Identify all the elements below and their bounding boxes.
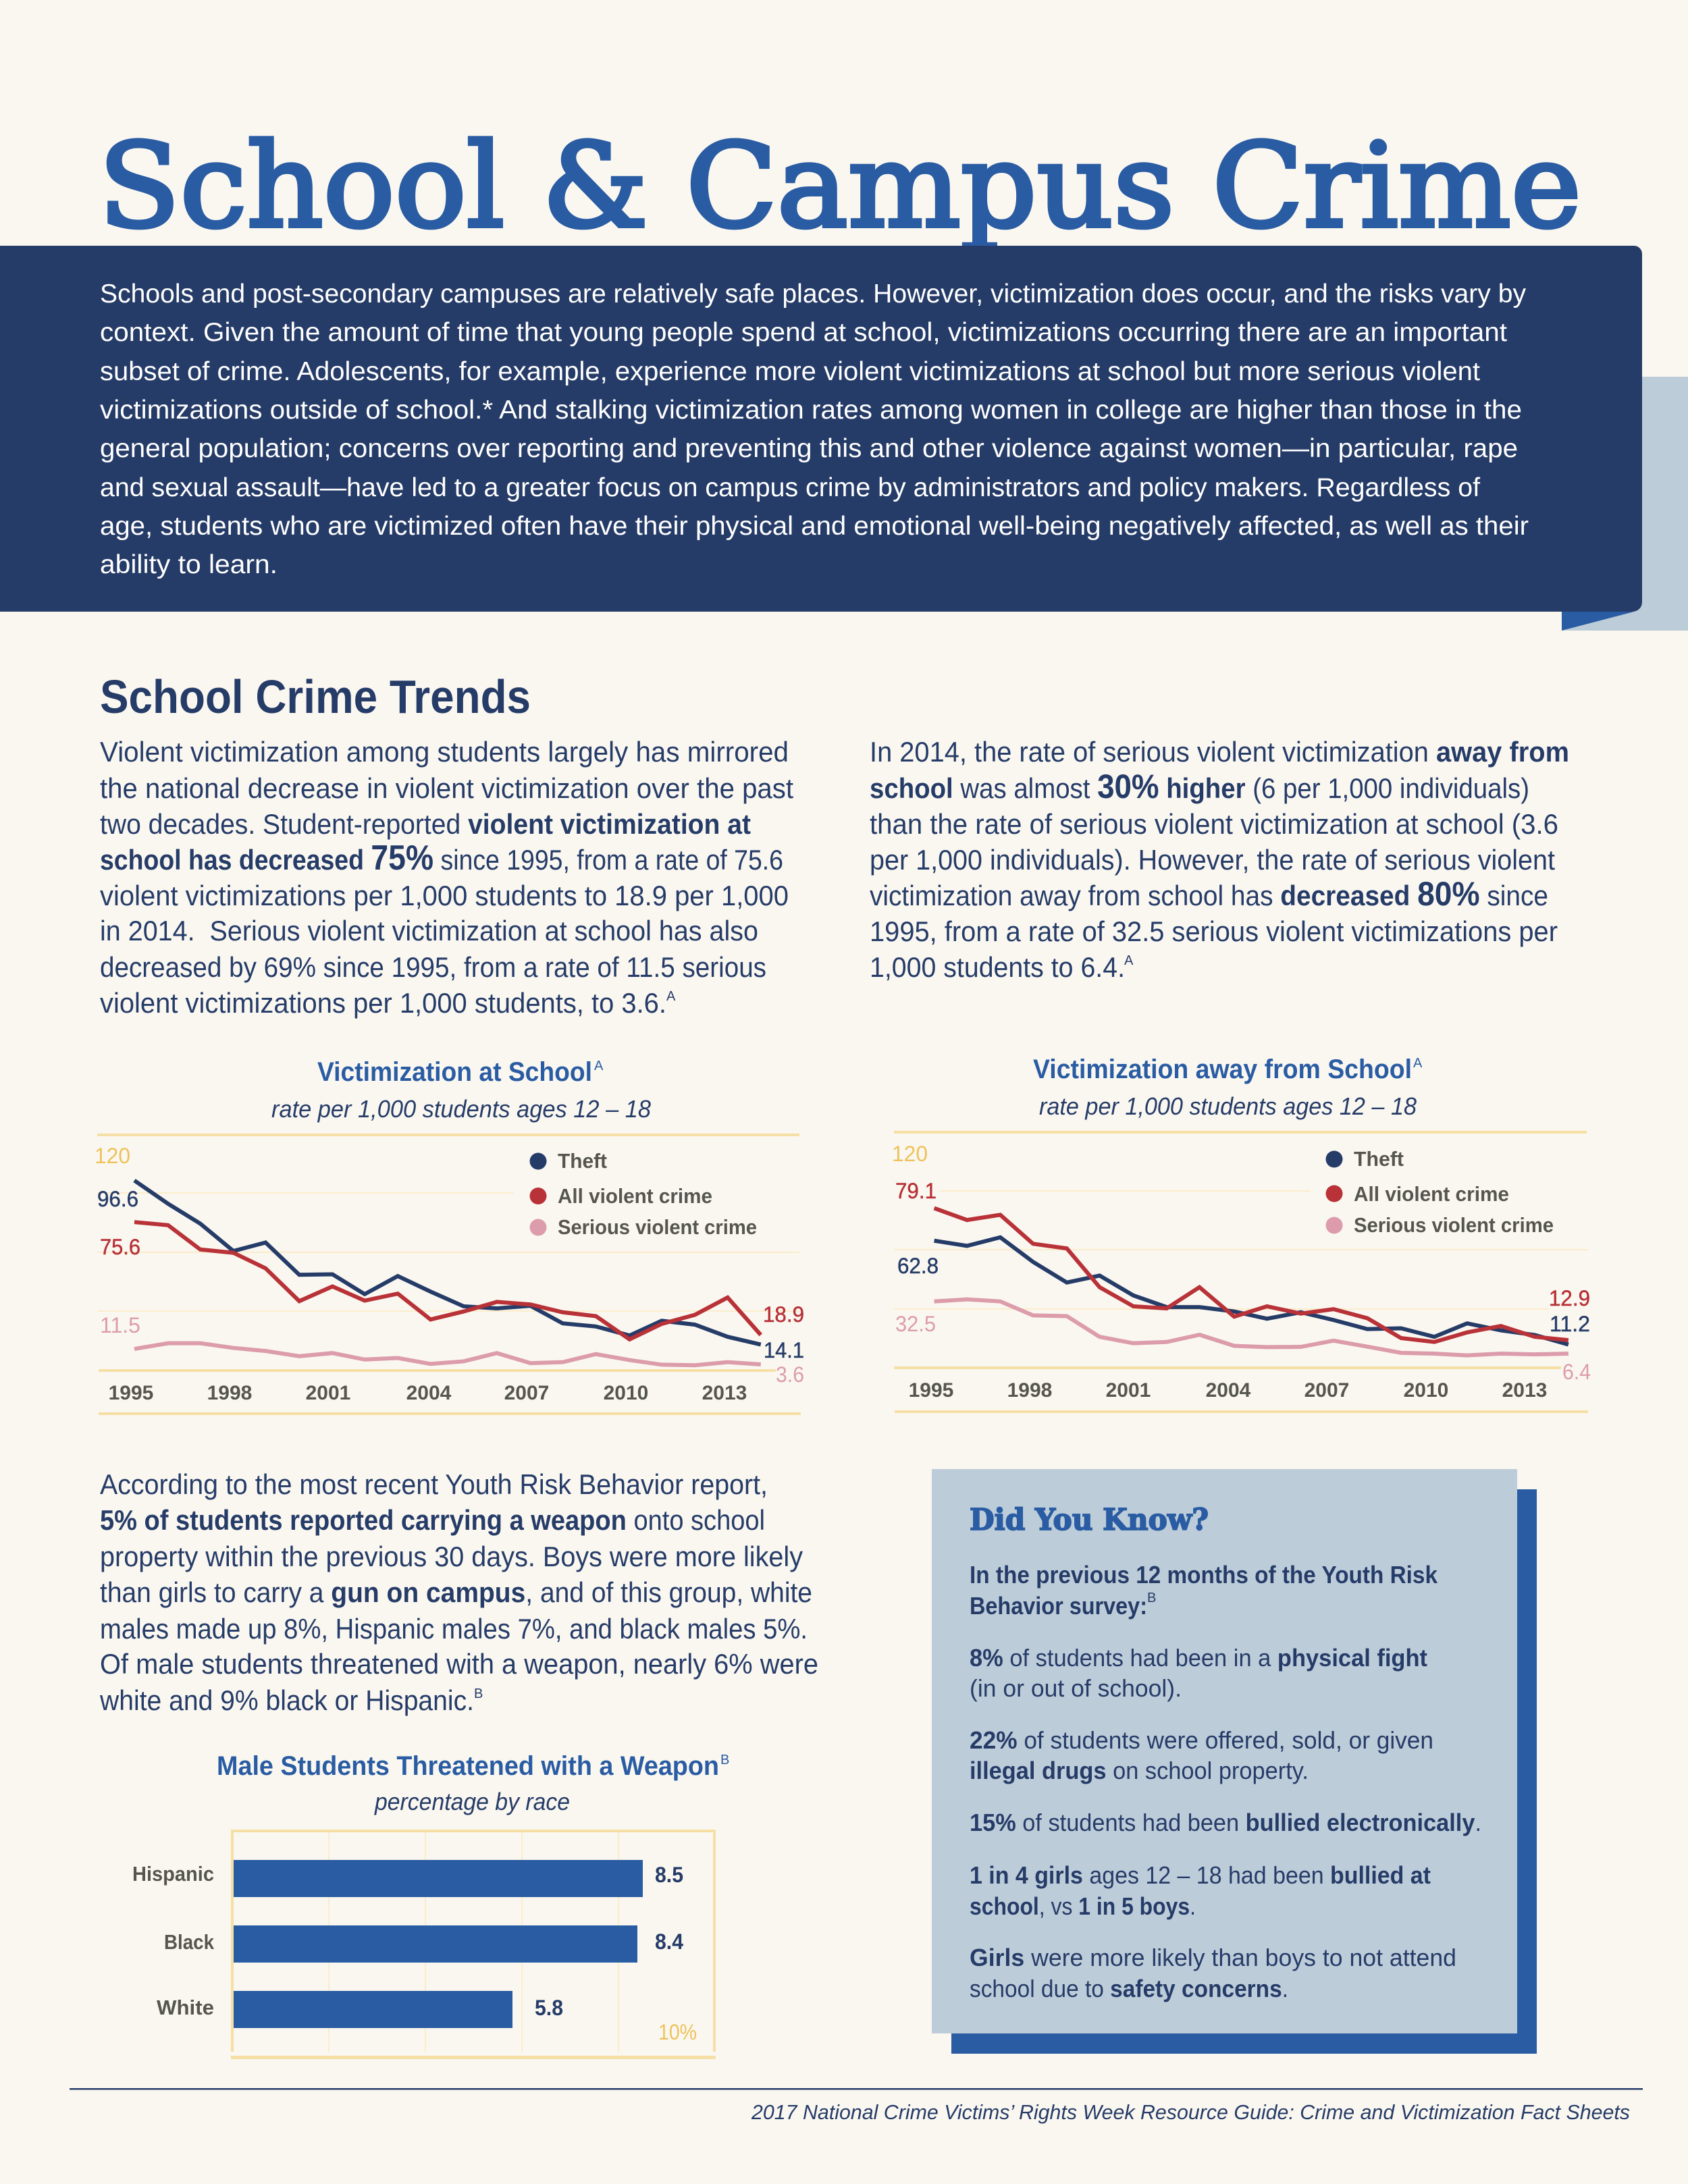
bar: White: 5.8 <box>535 1996 563 2020</box>
x axis years: 2001 <box>1106 1379 1151 1402</box>
text block: school trends right column: victimization away from school has decreased 80% since <box>870 875 1548 913</box>
bar: Hispanic: 8.5 <box>655 1863 683 1887</box>
legend: Theft <box>558 1149 607 1173</box>
x axis years: 2007 <box>504 1382 549 1404</box>
x axis years: 2013 <box>1502 1379 1547 1402</box>
fact: physical fight: 8% of students had been in a physical fight <box>970 1644 1427 1672</box>
text block: school trends right column: 1995, from a rate of 32.5 serious violent victimizations per <box>870 915 1558 947</box>
x axis years: 1995 <box>109 1382 153 1404</box>
x axis years: 2004 <box>406 1382 452 1404</box>
panel: intro banner <box>0 246 1642 612</box>
fact: safety concerns <box>970 1944 1456 2002</box>
series: theft <box>134 1181 761 1345</box>
bar: White: White <box>157 1996 214 2019</box>
legend: All violent crime <box>1354 1182 1509 1206</box>
value labels: 32.5 <box>895 1312 936 1336</box>
value labels: 11.2 <box>1550 1312 1590 1336</box>
fact: illegal drugs: 22% of students were offered, sold, or given <box>970 1726 1433 1754</box>
x axis years: 2004 <box>1206 1379 1251 1402</box>
series: all violent crime <box>934 1208 1568 1342</box>
value labels: 120 <box>892 1142 928 1166</box>
banner ribbon backing <box>1562 377 1688 631</box>
panel heading: Did You Know? <box>970 1503 1209 1537</box>
panel: intro banner: Schools and post-secondary campuses are relatively safe places. However, victimization does occur, and the risks vary by <box>100 279 1526 309</box>
x axis years: 1998 <box>1007 1379 1052 1402</box>
fact: physical fight: (in or out of school). <box>970 1674 1182 1702</box>
panel: intro banner: subset of crime. Adolescents, for example, experience more violent victimizations at school but more serious violent <box>100 357 1480 386</box>
text block: school trends right column: In 2014, the rate of serious violent victimization away from <box>870 736 1569 768</box>
panel: intro banner: victimizations outside of school.* And stalking victimization rates among women in college are higher than those in the <box>100 396 1522 425</box>
x axis years: 2010 <box>604 1382 648 1404</box>
series: all violent crime <box>134 1222 761 1339</box>
series: theft <box>934 1237 1568 1345</box>
series: serious violent crime <box>134 1343 761 1365</box>
legend: Serious violent crime <box>558 1215 757 1239</box>
text block: weapons paragraph: B <box>474 1686 483 1701</box>
chart: Victimization away from School <box>892 1055 1591 1413</box>
text block: weapons paragraph: According to the most recent Youth Risk Behavior report, <box>100 1468 768 1500</box>
text block: weapons paragraph: property within the previous 30 days. Boys were more likely <box>100 1541 803 1572</box>
x axis years <box>909 1379 1547 1402</box>
chart title: Victimization away from School <box>1033 1055 1412 1084</box>
panel intro: Behavior survey: <box>970 1592 1147 1620</box>
panel: intro banner: age, students who are victimized often have their physical and emotional well-being negatively affected, as well as their <box>100 512 1529 541</box>
panel: Did You Know <box>932 1469 1537 2054</box>
text block: school trends right column: than the rate of serious violent victimization at school (3.6 <box>870 808 1558 840</box>
title: School & Campus Crime <box>99 118 1581 254</box>
text block: weapons paragraph: than girls to carry a gun on campus, and of this group, white <box>100 1576 812 1608</box>
chart subtitle: rate per 1,000 students ages 12 – 18 <box>271 1095 651 1123</box>
fact: illegal drugs <box>970 1726 1433 1784</box>
text block: school trends left column: school has decreased 75% since 1995, from a rate of 75.6 <box>100 838 783 878</box>
fact: bullied electronically: 15% of students had been bullied electronically. <box>970 1809 1481 1836</box>
text block: weapons paragraph: 5% of students reported carrying a weapon onto school <box>100 1504 765 1536</box>
value labels: 6.4 <box>1562 1360 1591 1384</box>
value labels: 3.6 <box>776 1362 804 1387</box>
value labels: 11.5 <box>100 1313 140 1337</box>
x axis years: 1998 <box>207 1382 252 1404</box>
fact: bullied at school <box>970 1861 1431 1920</box>
panel: intro banner: context. Given the amount of time that young people spend at school, victimizations occurring there are an important <box>100 318 1507 347</box>
x axis years: 2001 <box>306 1382 350 1404</box>
panel: intro banner: and sexual assault—have led to a greater focus on campus crime by administrators and policy makers. Regardless of <box>100 473 1480 502</box>
value labels: 79.1 <box>895 1179 937 1203</box>
text block: school trends left column: decreased by 69% since 1995, from a rate of 11.5 serious <box>100 951 766 983</box>
bar: Black: Black <box>164 1930 215 1954</box>
chart title: Male Students Threatened with a Weapon <box>217 1751 719 1781</box>
legend <box>529 1149 757 1239</box>
text block: weapons paragraph: Of male students threatened with a weapon, nearly 6% were <box>100 1648 818 1680</box>
panel intro <box>970 1561 1438 1620</box>
text block: school trends left column: A <box>666 989 676 1004</box>
fact: safety concerns: school due to safety concerns. <box>970 1975 1288 2002</box>
panel intro: B <box>1147 1591 1156 1605</box>
panel: intro banner: general population; concerns over reporting and preventing this and other violence against women—in particular, rape <box>100 434 1518 463</box>
chart title: A <box>1413 1056 1423 1071</box>
value labels <box>892 1142 1591 1384</box>
series: serious violent crime <box>934 1300 1568 1356</box>
footer source line: 2017 National Crime Victims’ Rights Week Resource Guide: Crime and Victimization Fact Sheets <box>751 2100 1630 2124</box>
chart: Victimization at School <box>95 1057 804 1415</box>
text block: weapons paragraph: males made up 8%, Hispanic males 7%, and black males 5%. <box>100 1613 808 1645</box>
text block: school trends left column: the national decrease in violent victimization over the past <box>100 772 793 804</box>
text block: weapons paragraph <box>99 1468 818 1716</box>
text block: school trends left column: Violent victimization among students largely has mirrored <box>100 736 789 768</box>
chart title: B <box>720 1753 729 1767</box>
text block: school trends right column <box>870 736 1569 983</box>
value labels: 120 <box>95 1144 130 1168</box>
fact: safety concerns: Girls were more likely than boys to not attend <box>970 1944 1456 1971</box>
x axis years <box>109 1382 747 1404</box>
text block: school trends left column <box>100 736 793 1019</box>
panel intro: In the previous 12 months of the Youth Risk <box>970 1561 1438 1589</box>
text block: school trends right column: school was almost 30% higher (6 per 1,000 individuals) <box>870 768 1529 805</box>
text block: school trends right column: A <box>1124 953 1134 968</box>
chart title: A <box>594 1059 604 1073</box>
bar: White <box>157 1991 563 2028</box>
x axis years: 2010 <box>1404 1379 1448 1402</box>
value labels: 12.9 <box>1549 1286 1590 1310</box>
chart: Male Students Threatened with a Weapon <box>132 1751 729 2059</box>
x axis years: 1995 <box>909 1379 953 1402</box>
bar: Black: 8.4 <box>655 1929 683 1954</box>
chart subtitle: rate per 1,000 students ages 12 – 18 <box>1039 1092 1417 1120</box>
fact: illegal drugs: illegal drugs on school property. <box>970 1757 1309 1784</box>
value labels <box>95 1144 804 1387</box>
legend: Serious violent crime <box>1354 1213 1554 1237</box>
bar: Hispanic <box>132 1860 683 1897</box>
text block: school trends right column: per 1,000 individuals). However, the rate of serious violent <box>870 844 1555 876</box>
value labels: 18.9 <box>763 1302 804 1327</box>
x axis years: 2013 <box>702 1382 747 1404</box>
text block: school trends left column: violent victimizations per 1,000 students, to 3.6. <box>100 987 666 1019</box>
fact: bullied at school: 1 in 4 girls ages 12 – 18 had been bullied at <box>970 1861 1431 1889</box>
fact: bullied at school: school, vs 1 in 5 boys. <box>970 1892 1196 1920</box>
text block: weapons paragraph: white and 9% black or Hispanic. <box>99 1684 474 1716</box>
fact: physical fight <box>970 1644 1427 1702</box>
panel: intro banner: ability to learn. <box>100 550 278 579</box>
text block: school trends left column: two decades. Student-reported violent victimization at <box>100 808 751 840</box>
text block: school trends left column: in 2014. Serious violent victimization at school has also <box>100 915 758 947</box>
value labels: 62.8 <box>897 1254 939 1278</box>
text block: school trends right column: 1,000 students to 6.4. <box>870 951 1125 983</box>
value labels: 96.6 <box>97 1187 138 1211</box>
bar: Hispanic: Hispanic <box>132 1862 214 1886</box>
bar: Black <box>164 1925 683 1963</box>
chart title: Victimization at School <box>317 1057 592 1087</box>
legend: Theft <box>1354 1147 1404 1171</box>
value labels: 75.6 <box>100 1235 140 1259</box>
legend <box>1326 1147 1554 1237</box>
x axis years: 2007 <box>1304 1379 1349 1402</box>
chart subtitle: percentage by race <box>374 1788 570 1815</box>
legend: All violent crime <box>558 1184 712 1208</box>
text block: school trends left column: violent victimizations per 1,000 students to 18.9 per 1,000 <box>100 880 789 911</box>
value labels: 14.1 <box>764 1338 804 1362</box>
axis maximum label: 10% <box>658 2020 697 2044</box>
heading: School Crime Trends: School Crime Trends <box>100 670 531 723</box>
